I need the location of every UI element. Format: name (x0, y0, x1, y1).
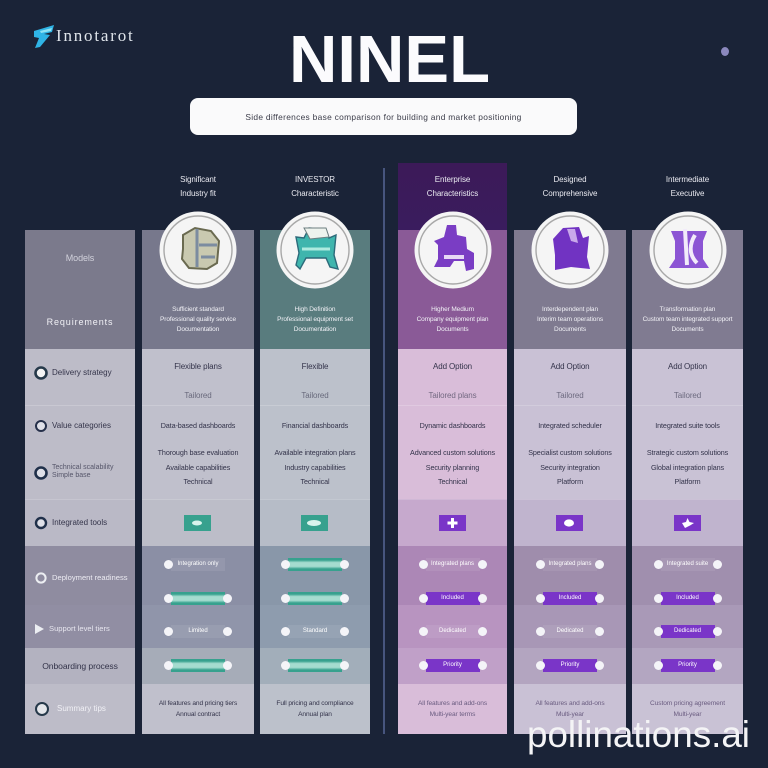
row 8 text: Full pricing and compliance (276, 700, 354, 707)
row label 1: Delivery strategy (52, 368, 112, 377)
column heading (427, 175, 478, 198)
pill row 5a: Integrated suite (667, 561, 708, 567)
badge (674, 515, 700, 531)
icon: column 4 emblem (531, 211, 609, 289)
row label 5: Deployment readiness (52, 573, 128, 582)
row 8 text: Annual contract (176, 711, 220, 718)
pill row 5b (164, 592, 232, 605)
requirements text: Company equipment plan (417, 316, 488, 323)
row 2 value: Integrated scheduler (538, 421, 602, 430)
pill row 6: Limited (188, 628, 208, 634)
watermark: pollinations.ai (527, 714, 750, 755)
column heading (180, 175, 216, 198)
pill row 6: Dedicated (674, 628, 701, 634)
row 1 values (428, 362, 476, 400)
row 1 values: Add Option (433, 362, 472, 371)
row 8 text (398, 698, 507, 720)
requirements text (160, 306, 236, 333)
row 3 value (158, 448, 238, 486)
pill row 5b: Included (441, 595, 464, 601)
row 8 text: Multi-year (556, 711, 584, 718)
row 1 values: Tailored (184, 391, 212, 400)
requirements text (416, 306, 488, 333)
row label 7: Onboarding process (42, 661, 118, 671)
pill row 6 (164, 627, 232, 636)
icon: column 1 emblem (160, 212, 236, 288)
requirements text: Documents (554, 326, 586, 333)
pill row 7: Priority (678, 662, 697, 668)
row 1 values: Tailored (556, 391, 584, 400)
row 8 text: All features and pricing tiers (159, 700, 237, 707)
requirements text: Sufficient standard (172, 306, 224, 313)
requirements text: Interdependent plan (542, 306, 598, 313)
row 3 value: Advanced custom solutions (410, 448, 495, 457)
requirements text: Interim team operations (537, 316, 603, 323)
row 8 text: All features and add-ons (418, 700, 487, 707)
column heading: Characteristics (427, 189, 478, 198)
row label 4: Integrated tools (52, 518, 107, 527)
column heading (291, 175, 339, 198)
column heading: Intermediate (666, 175, 709, 184)
column heading: Industry fit (180, 189, 216, 198)
row label 2: Value categories (52, 421, 111, 430)
row 1 values (632, 352, 743, 410)
badge (438, 515, 466, 531)
panel: column 3 (398, 175, 507, 734)
row 1 values: Tailored (301, 391, 329, 400)
row 3 value: Strategic custom solutions (647, 448, 728, 457)
icon: column 5 emblem (648, 211, 726, 289)
row 3 value: Security planning (426, 462, 479, 472)
row 3 value: Thorough base evaluation (158, 448, 238, 457)
column heading: Enterprise (435, 175, 470, 184)
column heading (632, 173, 743, 201)
pill row 5b (652, 592, 724, 605)
icon: column 2 emblem (276, 212, 354, 288)
row label 6: Support level tiers (49, 624, 110, 633)
pill row 6 (281, 627, 349, 636)
pill row 5b: Included (676, 595, 699, 601)
row label 3: Simple base (52, 472, 91, 479)
label: requirements: Requirements (47, 317, 113, 327)
panel: column 2 (260, 175, 370, 734)
icon: column 3 emblem (414, 212, 492, 288)
row 1 values (514, 352, 626, 410)
row 3 value: Industry capabilities (284, 462, 346, 472)
requirements text: Professional quality service (160, 316, 236, 323)
decorative status dot (721, 47, 729, 56)
pill row 5b (534, 592, 606, 605)
row 1 values: Tailored (674, 391, 701, 400)
row 3 value: Available integration plans (274, 448, 356, 457)
badge (556, 515, 583, 531)
panel: column 4 (514, 165, 626, 734)
row 8 text (514, 698, 626, 720)
row 3 value: Technical (438, 477, 467, 486)
pill row 7 (281, 659, 349, 672)
requirements text: Custom team integrated support (643, 316, 732, 323)
pill row 5b (281, 592, 349, 605)
pill row 5a (281, 558, 349, 571)
row 1 values: Flexible (302, 362, 328, 371)
row 2 value: Dynamic dashboards (420, 421, 485, 430)
row 3 value: Specialist custom solutions (528, 448, 612, 457)
requirements text (514, 305, 626, 335)
pill row 5a: Integrated plans (548, 561, 592, 567)
row 8 text (159, 700, 237, 718)
column heading: Comprehensive (543, 189, 597, 198)
pill row 7 (652, 659, 724, 672)
row 3 value: Global integration plans (651, 462, 724, 472)
row label 2 (35, 420, 111, 432)
row 8 text: Multi-year terms (430, 711, 475, 718)
requirements text: Transformation plan (660, 306, 715, 313)
pill row 6 (416, 625, 488, 638)
row 3 value: Available capabilities (166, 462, 230, 472)
requirements text: Documents (672, 326, 703, 333)
column heading: Designed (553, 175, 586, 184)
highlight band above column 3 (398, 163, 507, 230)
row 2 value: Integrated suite tools (655, 421, 720, 430)
requirements text: Professional equipment set (277, 316, 353, 323)
panel: column 1 (142, 175, 254, 734)
row 8 text (276, 700, 354, 718)
requirements text: Documentation (294, 326, 336, 333)
pill row 7 (164, 659, 232, 672)
column heading: Characteristic (291, 189, 339, 198)
pill row 7: Priority (561, 662, 579, 668)
column heading (514, 173, 626, 201)
row 3 value: Platform (557, 477, 583, 486)
pill row 7: Priority (443, 662, 462, 668)
pill row 5a (419, 558, 487, 571)
pill row 6: Dedicated (439, 628, 466, 634)
logo (34, 25, 135, 48)
requirements text: Documentation (177, 326, 219, 333)
requirements text (277, 306, 353, 333)
pill row 5b: Included (559, 595, 581, 601)
column heading: INVESTOR (295, 175, 335, 184)
label: header feature: Models (66, 253, 94, 263)
subtitle bar (190, 98, 577, 135)
row 3 value (274, 448, 356, 486)
row label 8 (35, 702, 106, 716)
column heading: Executive (671, 189, 704, 198)
pill row 5a (652, 558, 724, 571)
center divider (383, 168, 385, 734)
row label 8: Summary tips (57, 704, 106, 713)
row label 3 (34, 464, 114, 480)
row 2 value: Financial dashboards (282, 421, 348, 430)
pill row 5b (419, 592, 487, 605)
row 3 value: Technical (183, 477, 213, 486)
row 3 value: Security integration (540, 462, 600, 472)
requirements text (632, 305, 743, 335)
icon: logo mark (34, 25, 54, 48)
pill row 6 (534, 625, 606, 638)
row 1 values: Add Option (550, 362, 590, 371)
row 8 text: Custom pricing agreement (650, 700, 725, 707)
pill row 6: Standard (303, 628, 327, 634)
row 8 text: Annual plan (298, 711, 332, 718)
pill row 7 (534, 659, 606, 672)
row 8 text: Multi-year (674, 711, 701, 718)
row 3 value (632, 446, 743, 490)
row label 1 (34, 366, 112, 380)
row 1 values: Tailored plans (429, 391, 476, 400)
row label 3: Technical scalability (52, 464, 113, 471)
row 3 value (514, 446, 626, 490)
column heading: Significant (180, 175, 216, 184)
pill row 5a (164, 558, 225, 571)
row 8 text (632, 698, 743, 720)
row 8 text: All features and add-ons (535, 700, 605, 707)
badge (184, 515, 211, 531)
row 3 value: Platform (675, 477, 700, 486)
row 1 values: Flexible plans (174, 362, 222, 371)
pill row 7 (416, 659, 488, 672)
pill row 5a: Integration only (177, 561, 219, 567)
requirements text: High Definition (295, 306, 335, 313)
badge (301, 515, 328, 531)
pill row 5a: Integrated plans (431, 561, 474, 567)
row 3 value: Technical (300, 477, 330, 486)
subtitle text: Side differences base comparison for building and market positioning (245, 112, 522, 122)
requirements text: Higher Medium (431, 306, 474, 313)
requirements text: Documents (436, 326, 468, 333)
panel: column 5 (632, 165, 743, 734)
pill row 6 (652, 625, 724, 638)
row 2 value: Data-based dashboards (161, 421, 235, 430)
row label 4 (34, 516, 107, 530)
row 1 values: Add Option (668, 362, 707, 371)
row 1 values (174, 362, 222, 400)
row label 5 (35, 572, 128, 584)
row 3 value (410, 448, 495, 486)
row 1 values (301, 362, 329, 400)
pill row 6: Dedicated (556, 628, 584, 634)
title: NINEL (289, 22, 490, 97)
logo wordmark: Innotarot (56, 26, 135, 45)
pill row 5a (534, 558, 606, 571)
panel: row labels (25, 230, 135, 734)
